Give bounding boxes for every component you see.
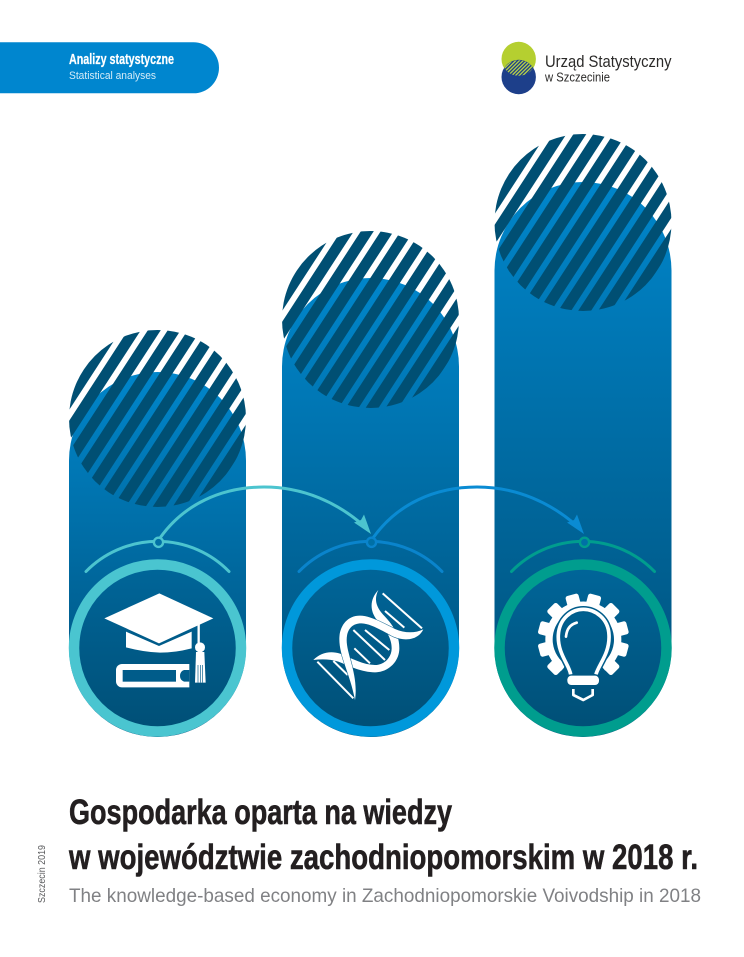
node on third arc <box>580 538 589 547</box>
icon: graduation cap and book <box>104 593 213 687</box>
logo: Urząd Statystyczny w Szczecinie: w Szczecinie <box>544 71 610 85</box>
column 3: innovation <box>494 134 672 737</box>
title <box>68 793 698 877</box>
icon: light bulb in gear <box>537 593 629 700</box>
column 2: science <box>282 231 459 737</box>
logo: Urząd Statystyczny w Szczecinie: Urząd Statystyczny <box>545 52 672 71</box>
icon: DNA helix <box>313 590 423 700</box>
arrow: science to innovation <box>367 487 584 547</box>
subtitle in English: The knowledge-based economy in Zachodniopomorskie Voivodship in 2018 <box>69 885 701 907</box>
logo: Urząd Statystyczny w Szczecinie <box>502 42 672 94</box>
title: Gospodarka oparta na wiedzy <box>69 793 452 832</box>
header pill: publication series: Analizy statystyczne <box>69 51 174 68</box>
arrow: education to science <box>154 487 371 547</box>
header pill: publication series: Statistical analyses <box>69 70 156 82</box>
column 1: education <box>69 330 246 737</box>
place and year, vertical: Szczecin 2019 <box>37 845 48 903</box>
header pill: publication series <box>0 42 219 93</box>
